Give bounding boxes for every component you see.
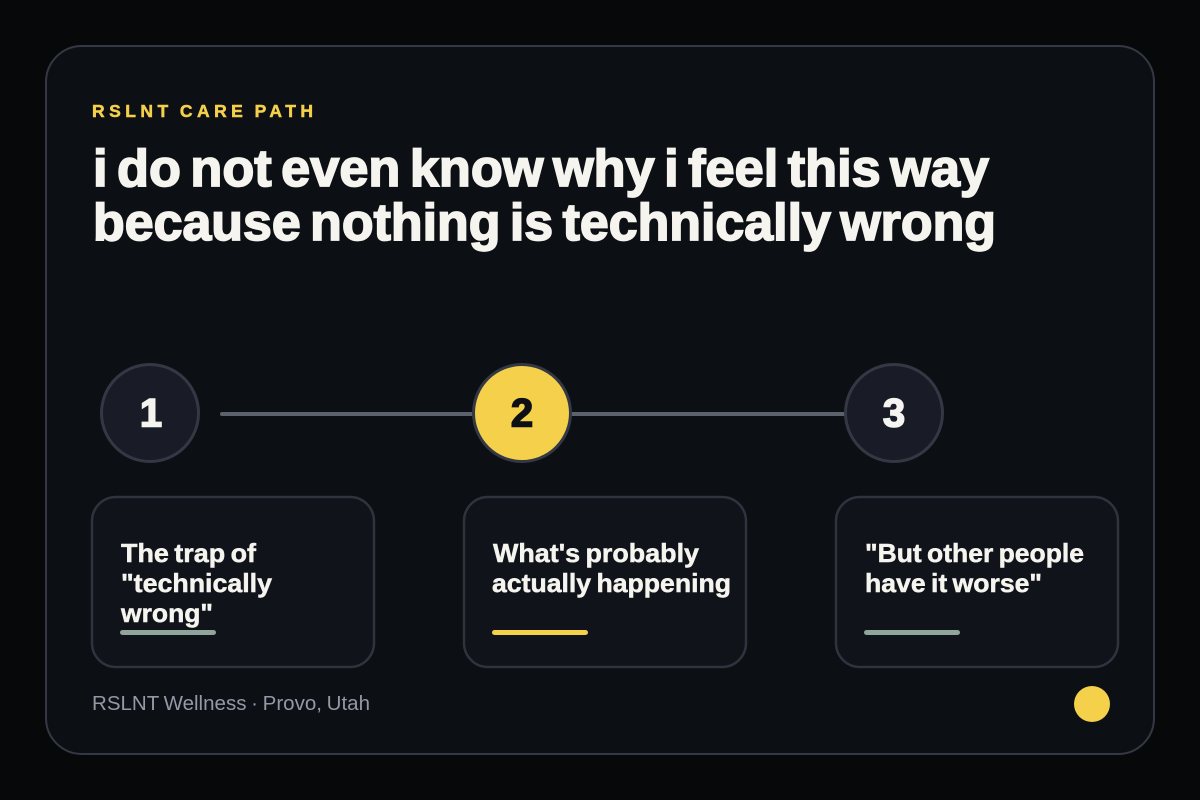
step 2 marker: 2 [511, 392, 533, 436]
panel: step 2 card [464, 497, 746, 667]
panel: step 3 card [836, 497, 1118, 667]
step 1 card text: wrong" [120, 598, 213, 628]
step 2 card text: actually happening [492, 568, 731, 598]
step 3 marker [846, 364, 942, 462]
footer dot [1074, 686, 1110, 722]
footer text: RSLNT Wellness · Provo, Utah [92, 693, 370, 715]
step 1 card text: The trap of [121, 538, 256, 568]
step 2 accent bar [492, 630, 588, 635]
step 3 card text [865, 538, 1084, 598]
panel: step 1 card [92, 497, 374, 667]
step 3 card text: "But other people [865, 538, 1084, 568]
step 2 card text [492, 538, 731, 598]
connector: step 1 to step 2 [220, 412, 474, 416]
step 3 marker: 3 [883, 392, 905, 436]
connector: step 2 to step 3 [570, 412, 846, 416]
step 3 accent bar [864, 630, 960, 635]
step 1 accent bar [120, 630, 216, 635]
title [93, 140, 996, 252]
title: because nothing is technically wrong [93, 194, 996, 252]
step 1 marker: 1 [140, 392, 162, 436]
step 2 card text: What's probably [493, 538, 700, 568]
step 2 marker [474, 364, 570, 462]
step 3 card text: have it worse" [865, 568, 1042, 598]
step 1 card text: "technically [121, 568, 273, 598]
eyebrow label: RSLNT CARE PATH [92, 101, 313, 121]
title: i do not even know why i feel this way [93, 140, 989, 198]
step 1 card text [120, 538, 273, 628]
step 1 marker [102, 364, 198, 462]
